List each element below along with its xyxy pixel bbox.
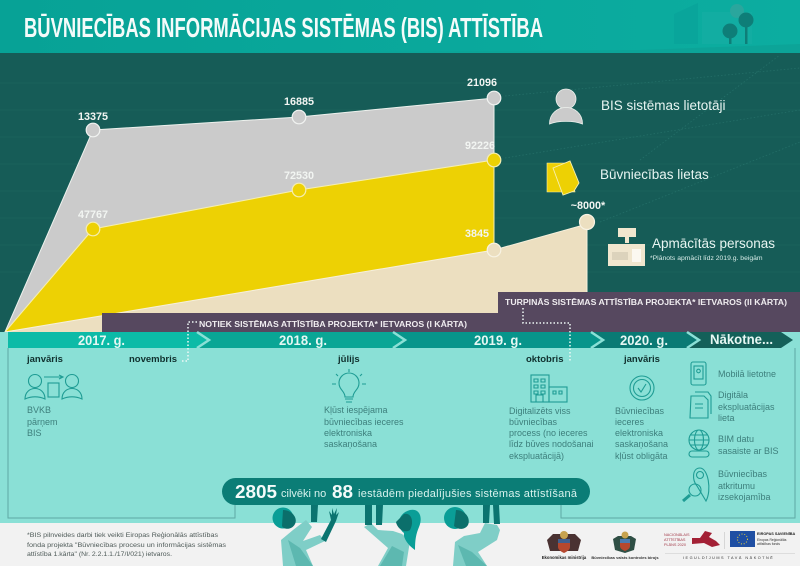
milestone: July 2018: saskaņošana [324, 439, 377, 449]
footnote [27, 531, 227, 558]
project band I [102, 313, 499, 333]
area: trained persons [5, 224, 587, 333]
area: construction cases [5, 160, 494, 332]
icon: trees [722, 4, 754, 44]
participation banner: 2805 [235, 481, 277, 502]
participation banner [222, 478, 590, 505]
timeline chevrons [8, 331, 793, 348]
icon: globe [689, 430, 709, 457]
future list [683, 362, 779, 502]
legend: trained persons: Apmācītās personas [652, 236, 775, 251]
logo: Latvia 2020 and EU: EIROPAS SAVIENĪBA [757, 532, 796, 536]
data values: 21096 [467, 77, 497, 89]
future list: lieta [718, 413, 735, 423]
data values: 72530 [284, 170, 314, 182]
icon: light bulb [332, 369, 366, 402]
footnote: fonda projekta "Būvniecības procesu un informācijas sistēmas [27, 542, 227, 549]
milestone: January 2017 [25, 354, 82, 438]
milestone: January 2020: ieceres [615, 417, 645, 427]
data values: 47767 [78, 209, 108, 221]
milestone: January 2017: pārņem [27, 417, 58, 427]
timeline chevrons: Nākotne... [710, 331, 773, 347]
footnote: *BIS pilnveides darbi tiek veikti Eiropas Reģionālās attīstības [27, 531, 219, 539]
timeline chevrons: 2017. g. [78, 332, 125, 348]
data values: 3845 [465, 228, 489, 240]
legend: construction cases [547, 161, 709, 195]
milestone: October 2019: Digitalizēts viss [509, 406, 571, 416]
title: BŪVNIECĪBAS INFORMĀCIJAS SISTĒMAS (BIS) ATTĪSTĪBA [24, 12, 543, 43]
future list: atkritumu [718, 481, 755, 491]
future list: Būvniecības [718, 469, 768, 479]
logo: Latvia 2020 and EU: attīstības fonds [757, 542, 780, 546]
milestone: January 2020: janvāris [623, 354, 660, 365]
markers: construction cases [86, 153, 501, 236]
project band II: TURPINĀS SISTĒMAS ATTĪSTĪBA PROJEKTA* IETVAROS (II KĀRTA) [505, 297, 787, 307]
milestone: July 2018: Kļūst iespējama [324, 405, 388, 415]
legend: BIS users: BIS sistēmas lietotāji [601, 98, 726, 113]
future list: Mobilā lietotne [718, 369, 776, 379]
legend: trained persons: *Plānots apmācīt līdz 2019.g. beigām [650, 255, 763, 262]
milestone: January 2020: elektroniska [615, 428, 663, 438]
timeline chevrons: 2020. g. [620, 332, 668, 348]
area: BIS users [5, 98, 494, 332]
future list: Digitāla [718, 390, 748, 400]
participation banner: iestādēm piedalījušies sistēmas attīstīšanā [358, 488, 578, 500]
footnote: attīstība 1.kārta" (Nr. 2.2.1.1./17/I/021) ietvaros. [27, 551, 172, 558]
milestone: July 2018: elektroniska [324, 428, 372, 438]
area chart [5, 77, 606, 333]
legend: trained persons [608, 228, 775, 266]
markers: trained persons [487, 214, 594, 257]
milestone: October 2019: būvniecības [509, 417, 558, 427]
milestone: January 2017: BVKB [27, 405, 51, 415]
logo: Latvia 2020 and EU: PLĀNS 2020 [664, 543, 686, 547]
logo: Latvia 2020 and EU: IEGULDĪJUMS TAVĀ NĀKOTNĒ [683, 556, 774, 560]
icon: digital file [690, 392, 711, 418]
icon: buildings [531, 375, 567, 402]
data values: 16885 [284, 96, 314, 108]
timeline chevrons: 2019. g. [474, 332, 522, 348]
icon: handover [25, 374, 82, 399]
milestone: July 2018 [324, 354, 404, 449]
person 2 [364, 505, 421, 566]
milestone: October 2019 [509, 354, 594, 461]
future list: sasaiste ar BIS [718, 446, 779, 456]
milestone: November 2017: novembris [129, 354, 177, 365]
icon: location magnifier [683, 468, 709, 501]
future list: BIM datu [718, 434, 754, 444]
illustration: people holding the banner [272, 505, 500, 566]
logo: Latvia 2020 and EU: ATTĪSTĪBAS [664, 538, 686, 542]
milestone: January 2017: janvāris [26, 354, 63, 365]
milestone: January 2020: saskaņošana [615, 439, 668, 449]
data values: ~8000* [571, 200, 606, 212]
project band II [498, 292, 800, 333]
chart background [0, 53, 800, 333]
milestone: July 2018: būvniecības ieceres [324, 417, 404, 427]
panel outline [8, 348, 795, 518]
milestone: January 2020: Būvniecības [615, 406, 665, 416]
logo: Latvia 2020 and EU [664, 531, 796, 560]
logo: Ministry of Economics: Ekonomikas ministrija [542, 555, 587, 560]
icon: check seal [630, 376, 654, 400]
dotted connectors [181, 308, 570, 362]
person 3 [444, 505, 500, 566]
data values: 92226 [465, 140, 495, 152]
participation banner: 88 [332, 481, 353, 502]
timeline panel [0, 332, 800, 523]
milestone: October 2019: process (no ieceres [509, 428, 588, 438]
milestone: October 2019: līdz būves nodošanai [509, 439, 594, 449]
milestone: October 2019: ekspluatācijā) [509, 451, 564, 461]
timeline chevrons: 2018. g. [279, 332, 327, 348]
logo: Latvia 2020 and EU: NACIONĀLAIS [664, 533, 690, 537]
person 1 [272, 505, 339, 566]
markers: BIS users [86, 91, 501, 137]
project band I: NOTIEK SISTĒMAS ATTĪSTĪBA PROJEKTA* IETVAROS (I KĀRTA) [199, 319, 467, 329]
data values: 13375 [78, 111, 108, 123]
milestone: July 2018: jūlijs [337, 354, 360, 365]
header band [0, 0, 800, 53]
future list: izsekojamība [718, 492, 771, 502]
participation banner: cilvēki no [281, 488, 326, 500]
logo: Ministry of Economics [542, 531, 587, 560]
legend: BIS users [550, 89, 726, 124]
logo: Latvia 2020 and EU: Eiropas Reģionālās [757, 537, 787, 542]
milestone: January 2020 [615, 354, 668, 461]
future list: ekspluatācijas [718, 402, 775, 412]
data values [78, 77, 606, 240]
legend: construction cases: Būvniecības lietas [600, 167, 709, 182]
logo: Construction State Control Bureau [591, 532, 659, 560]
logo: Construction State Control Bureau: Būvniecības valsts kontroles birojs [591, 555, 659, 560]
milestone: January 2020: kļūst obligāta [615, 451, 668, 461]
icon: mobile phone [691, 362, 706, 385]
milestone: October 2019: oktobris [526, 354, 563, 365]
milestone: January 2017: BIS [27, 428, 42, 438]
